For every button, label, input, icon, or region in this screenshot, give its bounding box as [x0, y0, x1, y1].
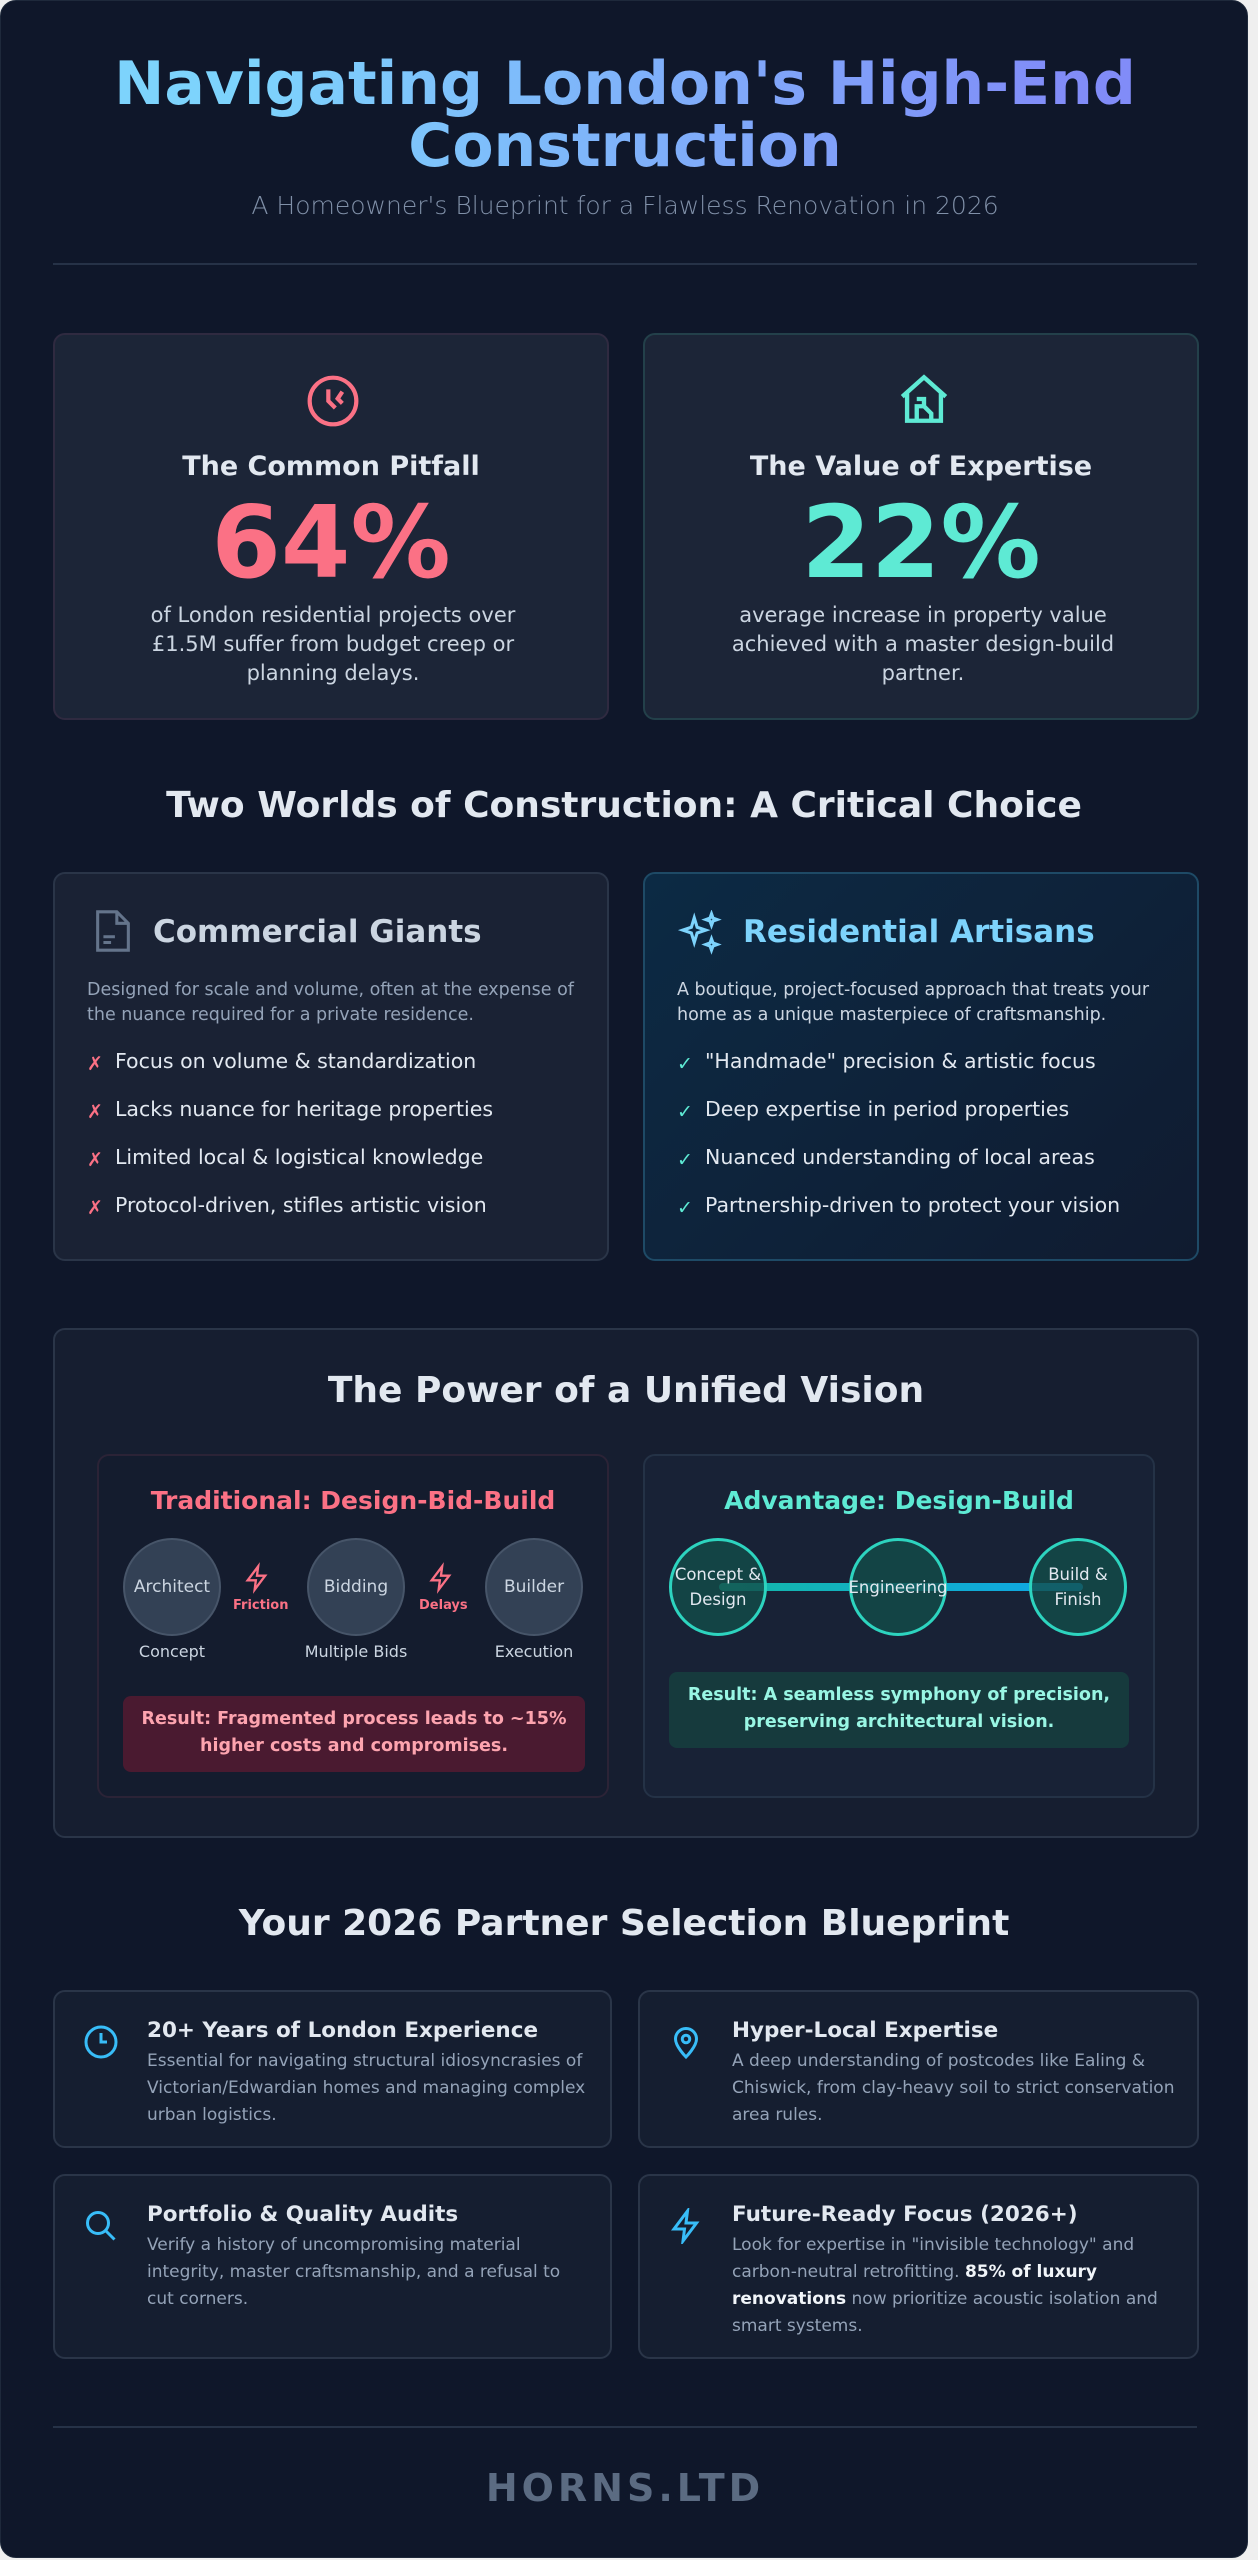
card: experience: 20+ Years of London Experience: [147, 2018, 538, 2043]
card: hyper-local: [638, 1990, 1199, 2148]
panel: residential artisans: ✓: [677, 1149, 693, 1171]
panel: commercial giants: ✗: [87, 1101, 103, 1123]
list: [87, 1049, 493, 1219]
process flow: Execution: [495, 1642, 573, 1661]
list: Lacks nuance for heritage properties: [115, 1097, 493, 1121]
result box: [123, 1696, 585, 1772]
heading: Commercial Giants: [153, 914, 482, 950]
sub heading: Advantage: Design-Build: [724, 1486, 1074, 1515]
description: average increase in property value achieved with a master design-build partner.: [732, 603, 1114, 685]
card: portfolio: [53, 2174, 612, 2359]
description: Designed for scale and volume, often at the expense of the nuance required for a private residence.: [87, 980, 574, 1025]
result box: [669, 1672, 1129, 1748]
process flow: Concept &: [675, 1565, 761, 1584]
number: 64%: [211, 484, 451, 601]
list: Deep expertise in period properties: [705, 1097, 1069, 1121]
icon: map pin: [674, 2027, 698, 2059]
panel: residential artisans: ✓: [677, 1197, 693, 1219]
panel: residential artisans: ✓: [677, 1053, 693, 1075]
heading: The Common Pitfall: [182, 451, 480, 482]
stat card: pitfall: [53, 333, 609, 720]
process flow: Engineering: [848, 1578, 948, 1596]
panel: commercial giants: ✗: [87, 1149, 103, 1171]
process flow: Builder: [504, 1576, 564, 1596]
title: [1, 53, 1249, 177]
icon: search: [86, 2211, 116, 2240]
title: Navigating London's High-End: [114, 49, 1136, 119]
card: experience: [53, 1990, 612, 2148]
subtitle: A Homeowner's Blueprint for a Flawless Renovation in 2026: [251, 191, 999, 220]
list: Nuanced understanding of local areas: [705, 1145, 1095, 1169]
panel: commercial giants: [53, 872, 609, 1261]
card: portfolio: Verify a history of uncompromising material integrity, master craftsmanship, and a refusal to cut corners.: [147, 2235, 560, 2309]
section heading: two worlds: Two Worlds of Construction: A Critical Choice: [166, 785, 1082, 826]
process flow: Design: [690, 1590, 746, 1609]
section heading: blueprint: Your 2026 Partner Selection Blueprint: [239, 1903, 1009, 1944]
process flow: [123, 1538, 583, 1661]
footer brand: HORNS.LTD: [486, 2466, 764, 2510]
sub heading: Traditional: Design-Bid-Build: [151, 1486, 555, 1515]
icon: document: [96, 910, 130, 952]
panel: commercial giants: ✗: [87, 1197, 103, 1219]
process flow: Bidding: [324, 1576, 388, 1596]
heading: The Value of Expertise: [750, 451, 1092, 482]
result box: Result: A seamless symphony of precision, preserving architectural vision.: [688, 1685, 1110, 1732]
process flow: [669, 1538, 1127, 1636]
process flow: Friction: [233, 1598, 288, 1613]
list: Protocol-driven, stifles artistic vision: [115, 1193, 487, 1217]
icon: clock alert: [308, 376, 358, 426]
stat card: expertise: [643, 333, 1199, 720]
list: [677, 1049, 1120, 1219]
process flow: Finish: [1054, 1590, 1101, 1609]
card: future-ready: Future-Ready Focus (2026+): [732, 2202, 1078, 2227]
sub-panel: design-build: [643, 1454, 1155, 1798]
list: Focus on volume & standardization: [115, 1049, 476, 1073]
panel: residential artisans: ✓: [677, 1101, 693, 1123]
icon: house: [900, 374, 948, 423]
card: future-ready: Look for expertise in "invisible technology" and carbon-neutral retrofitting. 85% of luxury renovations now prioritize acoustic isolation and smart systems.: [732, 2235, 1158, 2336]
card: future-ready: [638, 2174, 1199, 2359]
list: Limited local & logistical knowledge: [115, 1145, 483, 1169]
icon: sparkles: [678, 910, 722, 955]
process flow: Build &: [1048, 1565, 1108, 1584]
number: 22%: [801, 484, 1041, 601]
panel: commercial giants: ✗: [87, 1053, 103, 1075]
card: experience: Essential for navigating structural idiosyncrasies of Victorian/Edwardian homes and managing complex urban logistics.: [147, 2051, 585, 2125]
list: Partnership-driven to protect your vision: [705, 1193, 1120, 1217]
process flow: Architect: [134, 1576, 210, 1596]
card: hyper-local: Hyper-Local Expertise: [732, 2018, 998, 2043]
result box: Result: Fragmented process leads to ~15% higher costs and compromises.: [142, 1709, 566, 1756]
icon: clock: [84, 2026, 118, 2058]
card: hyper-local: A deep understanding of postcodes like Ealing & Chiswick, from clay-heavy soil to strict conservation area rules.: [732, 2051, 1174, 2125]
description: of London residential projects over £1.5M suffer from budget creep or planning delays.: [151, 603, 515, 685]
icon: lightning: [671, 2208, 700, 2244]
description: A boutique, project-focused approach that treats your home as a unique masterpiece of craftsmanship.: [677, 980, 1149, 1025]
panel: unified vision: [53, 1328, 1199, 1838]
title: Construction: [408, 111, 842, 181]
process flow: Multiple Bids: [305, 1642, 407, 1661]
panel: residential artisans: [643, 872, 1199, 1261]
process flow: Delays: [419, 1598, 468, 1613]
process flow: Concept: [139, 1642, 205, 1661]
list: "Handmade" precision & artistic focus: [705, 1049, 1096, 1073]
card: portfolio: Portfolio & Quality Audits: [147, 2202, 458, 2227]
sub-panel: traditional: [97, 1454, 609, 1798]
heading: The Power of a Unified Vision: [328, 1370, 924, 1411]
heading: Residential Artisans: [743, 914, 1095, 950]
